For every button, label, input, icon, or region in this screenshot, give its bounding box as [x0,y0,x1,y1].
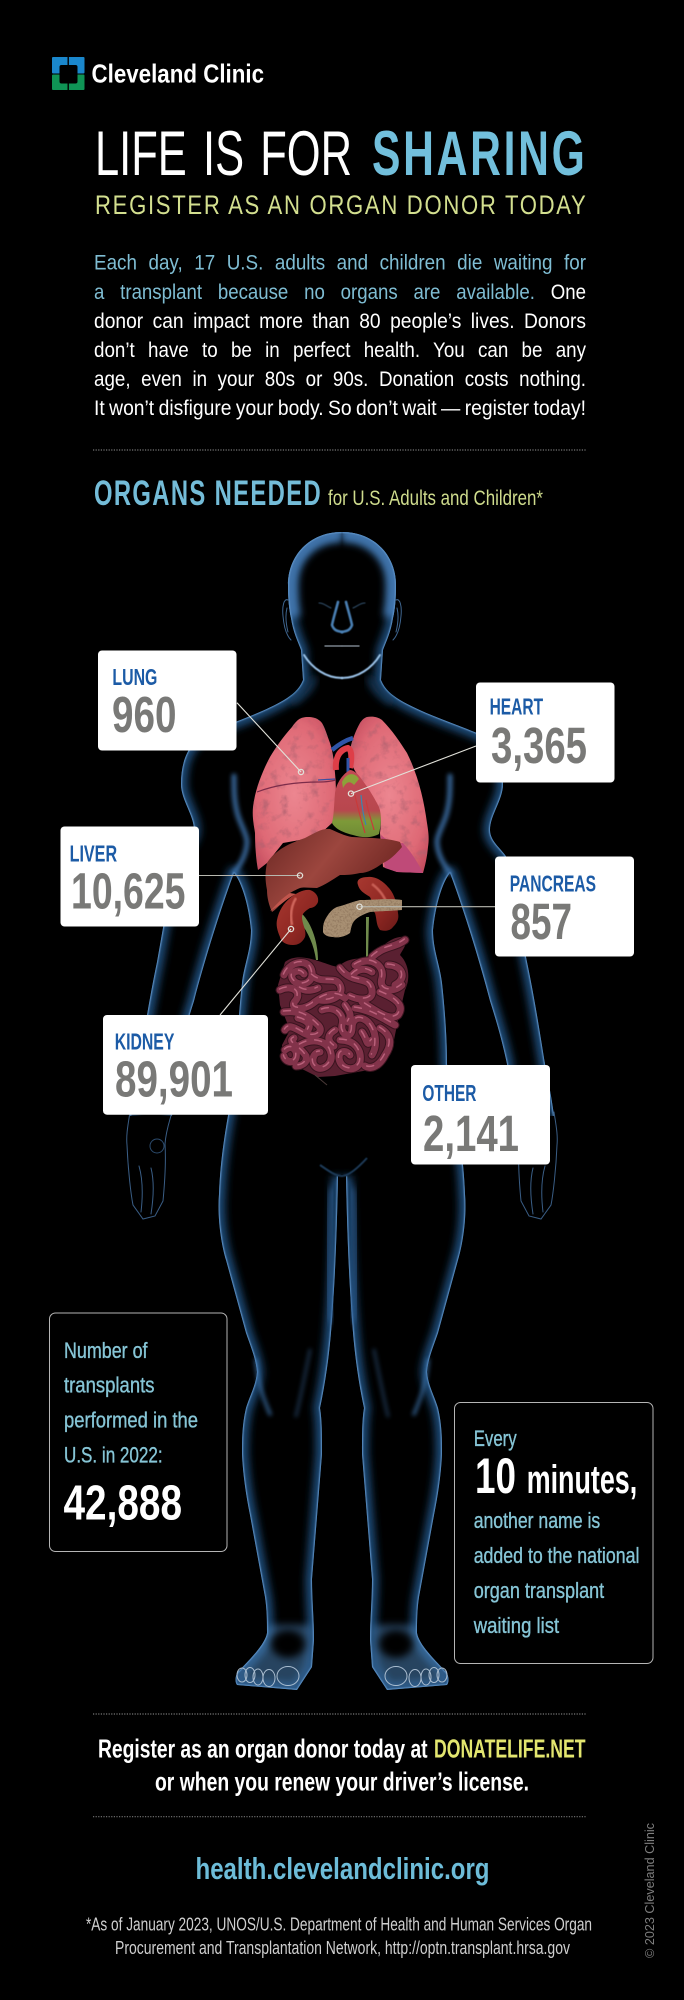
callout: pancreas: PANCREAS [510,870,596,896]
ureters [300,912,369,960]
call to action [98,1734,586,1797]
call to action: Register as an organ donor today at [98,1734,428,1764]
kidney right [357,877,398,931]
stat panel: transplants performed [50,1313,227,1552]
intro paragraph: donor can impact more than 80 people’s lives. Donors [94,310,586,333]
stat panel: transplants performed: 42,888 [64,1477,182,1531]
intestines [278,937,408,1085]
logo: Cleveland Clinic [52,57,264,90]
call to action: or when you renew your driver’s license. [155,1767,529,1797]
callout: pancreas [495,856,634,956]
intro paragraph: age, even in your 80s or 90s. Donation costs nothing. [94,368,586,391]
stat panel: every 10 minutes: Every [474,1426,517,1451]
leader lines [199,703,495,1015]
stat panel: transplants performed: Number of [64,1338,148,1363]
callout: heart: HEART [490,694,544,720]
stat panel: every 10 minutes: organ transplant [474,1578,604,1603]
stat panel: transplants performed: performed in the [64,1408,198,1432]
title: LIFE IS FOR [95,119,352,189]
intro paragraph: don’t have to be in perfect health. You can be any [94,339,586,362]
callout: kidney [103,1015,268,1115]
lung lower magenta lobe [381,835,423,873]
organs illustration [253,717,429,1085]
callout: kidney: 89,901 [115,1050,233,1108]
callout: heart [476,682,614,782]
lungs [253,717,429,873]
copyright: © 2023 Cleveland Clinic [643,1823,657,1958]
callout: liver: LIVER [70,841,117,867]
title: SHARING [372,119,588,189]
website url: health.clevelandclinic.org [196,1851,490,1886]
logo: Cleveland Clinic: Cleveland Clinic [92,58,264,88]
intro paragraph: It won’t disfigure your body. So don’t wait — register today! [94,397,586,420]
callout: pancreas: 857 [510,893,572,950]
callout: kidney: KIDNEY [115,1028,175,1054]
call to action: DONATELIFE.NET [434,1734,586,1764]
human body outline [127,532,557,1690]
stat panel: every 10 minutes: added to the national [474,1543,639,1568]
callout: lung: 960 [112,686,176,743]
stat panel: transplants performed: transplants [64,1372,154,1398]
great vessels [332,738,353,774]
stat panel: every 10 minutes: 10 [475,1448,516,1504]
footnote [86,1914,592,1958]
heart [332,770,381,837]
intro paragraph: a transplant because no organs are available. One [94,281,586,304]
pancreas [323,899,402,937]
stat panel: every 10 minutes [454,1402,653,1664]
stat panel: every 10 minutes: another name is [474,1508,600,1533]
callout: liver: 10,625 [71,863,186,920]
callout: lung [98,650,236,750]
stat panel: transplants performed: U.S. in 2022: [64,1442,163,1468]
kidney left [277,890,318,945]
subtitle: REGISTER AS AN ORGAN DONOR TODAY [95,190,588,220]
callout: other [411,1065,550,1164]
callout: liver [60,826,199,926]
intro paragraph [94,252,586,420]
callout: lung: LUNG [112,664,157,690]
callout: other: 2,141 [423,1105,519,1162]
liver [266,829,402,912]
intro paragraph: Each day, 17 U.S. adults and children die waiting for [94,252,586,274]
callout: other: OTHER [422,1080,476,1106]
callout: heart: 3,365 [491,717,587,774]
section heading: organs needed: for U.S. Adults and Children* [328,487,543,510]
stat panel: every 10 minutes: waiting list [473,1613,559,1638]
section heading: organs needed: ORGANS NEEDED [94,474,322,513]
